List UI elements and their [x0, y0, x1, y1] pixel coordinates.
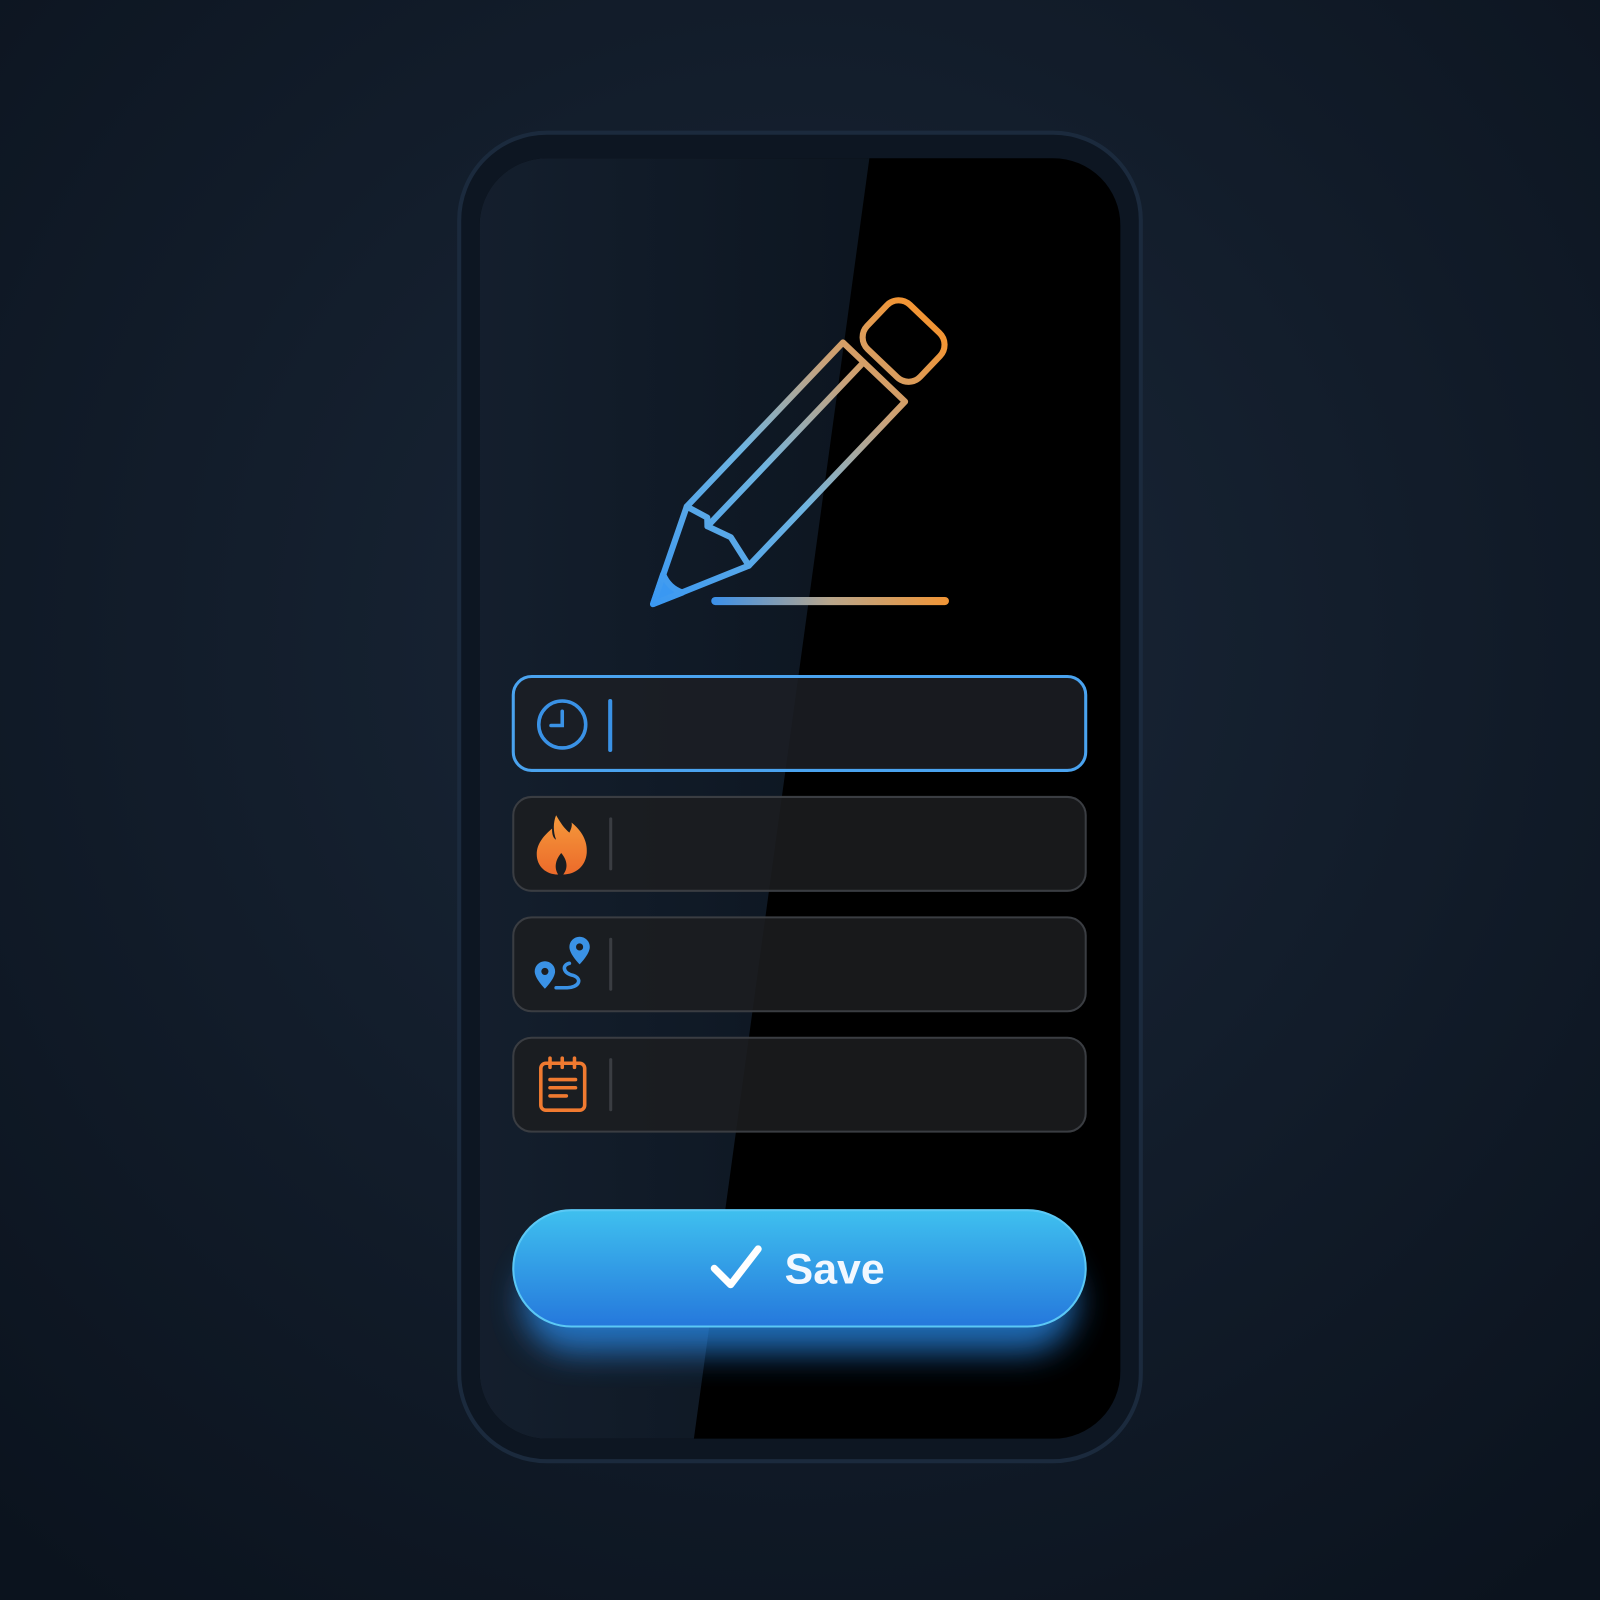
- field: route: [513, 917, 1086, 1011]
- button label: Save: [785, 1246, 885, 1294]
- field: calories: [513, 797, 1086, 891]
- save button: [513, 1210, 1086, 1352]
- icon: route pins: [535, 937, 590, 989]
- icon: checkmark: [714, 1249, 758, 1285]
- underline stroke: [711, 597, 949, 605]
- phone frame: [459, 133, 1141, 1461]
- icon: pencil: [622, 289, 956, 634]
- screen: [480, 158, 1120, 1439]
- field: time: [513, 677, 1086, 770]
- icon: flame: [537, 815, 587, 874]
- icon: notepad: [541, 1058, 585, 1110]
- field: notes: [513, 1038, 1086, 1132]
- icon: clock: [539, 701, 586, 748]
